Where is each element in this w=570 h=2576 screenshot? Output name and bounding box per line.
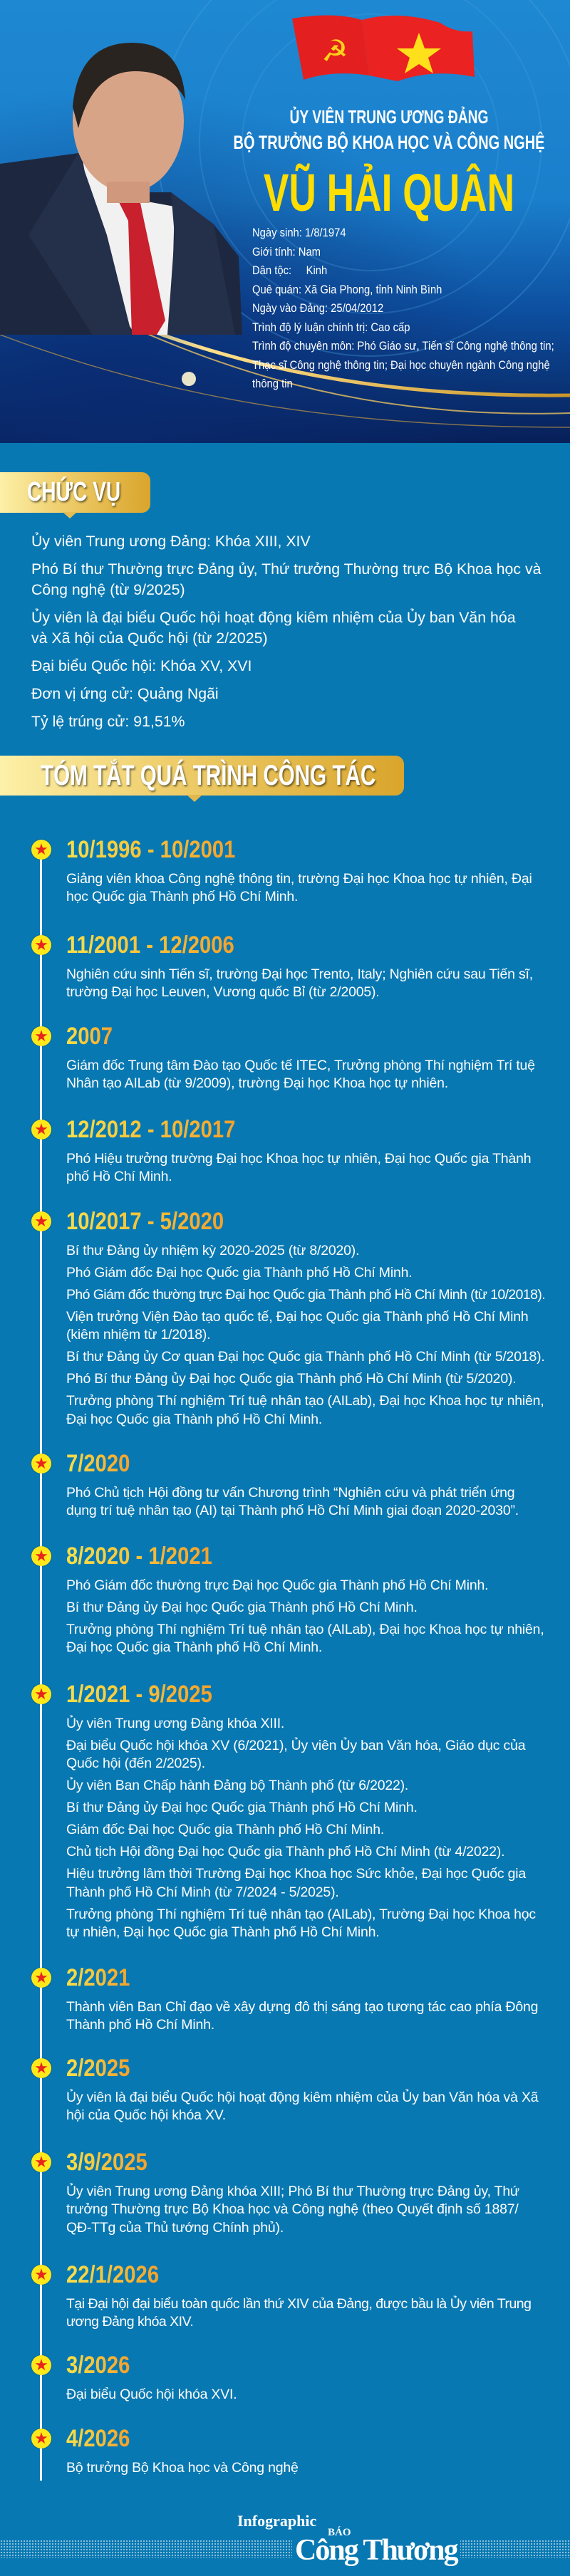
- flag: ☭: [321, 33, 348, 68]
- text block: positions: Tỷ lệ trúng cử: 91,51%: [31, 713, 185, 730]
- timeline item 14: 4/2026: [66, 2425, 130, 2452]
- timeline item 5: [66, 1208, 545, 1427]
- timeline item 13: Đại biểu Quốc hội khóa XVI.: [66, 2387, 237, 2402]
- timeline item 6: Phó Chủ tịch Hội đồng tư vấn Chương trình “Nghiên cứu và phát triển ứng: [66, 1485, 514, 1501]
- timeline item 8: [66, 1681, 536, 1940]
- text block: positions: Đại biểu Quốc hội: Khóa XV, XVI: [31, 657, 252, 674]
- timeline item 4: 12/2012 - 10/2017: [66, 1116, 235, 1143]
- timeline item 6: [66, 1450, 519, 1518]
- footer logo: [237, 2512, 460, 2567]
- personal info: Quê quán: Xã Gia Phong, tỉnh Ninh Bình: [252, 282, 442, 296]
- timeline item 8: Ủy viên Trung ương Đảng khóa XIII.: [66, 1716, 284, 1731]
- personal info: thông tin: [252, 377, 293, 390]
- timeline item 4: Phó Hiệu trưởng trường Đại học Khoa học tự nhiên, Đại học Quốc gia Thành: [66, 1151, 531, 1167]
- timeline item 9: Thành phố Hồ Chí Minh.: [66, 2017, 214, 2033]
- text block: positions: Ủy viên Trung ương Đảng: Khóa XIII, XIV: [31, 533, 311, 550]
- timeline item 3: [66, 1023, 535, 1091]
- timeline item 6: dụng trí tuệ nhân tạo (AI) tại Thành phố Hồ Chí Minh giai đoạn 2020-2030”.: [66, 1503, 519, 1518]
- text block: positions: Công nghệ (từ 9/2025): [31, 581, 185, 598]
- timeline item 14: Bộ trưởng Bộ Khoa học và Công nghệ: [66, 2460, 299, 2476]
- timeline item 9: 2/2021: [66, 1964, 130, 1991]
- photo: portrait: [0, 43, 242, 335]
- text block: positions: [31, 533, 542, 730]
- timeline item 3: Nhân tạo AILab (từ 9/2009), trường Đại học Khoa học tự nhiên.: [66, 1075, 448, 1091]
- timeline item 2: [66, 932, 533, 1000]
- timeline item 8: tự nhiên, Đại học Quốc gia Thành phố Hồ Chí Minh.: [66, 1924, 380, 1940]
- timeline item 12: 22/1/2026: [66, 2261, 159, 2288]
- flag: [292, 16, 475, 81]
- timeline item 5: Phó Bí thư Đảng ủy Đại học Quốc gia Thành phố Hồ Chí Minh (từ 5/2020).: [66, 1371, 516, 1387]
- timeline item 1: Giảng viên khoa Công nghệ thông tin, trường Đại học Khoa học tự nhiên, Đại: [66, 871, 532, 887]
- timeline item 5: Bí thư Đảng ủy Cơ quan Đại học Quốc gia Thành phố Hồ Chí Minh (từ 5/2018).: [66, 1349, 545, 1365]
- heading: timeline: TÓM TẮT QUÁ TRÌNH CÔNG TÁC: [41, 760, 375, 791]
- timeline item 5: Bí thư Đảng ủy nhiệm kỳ 2020-2025 (từ 8/2020).: [66, 1243, 359, 1258]
- timeline item 11: QĐ-TTg của Thủ tướng Chính phủ).: [66, 2220, 284, 2236]
- timeline item 9: Thành viên Ban Chỉ đạo về xây dựng đô thị sáng tạo tương tác cao phía Đông: [66, 1999, 538, 2015]
- timeline item 7: Đại học Quốc gia Thành phố Hồ Chí Minh.: [66, 1639, 322, 1655]
- timeline item 5: Viện trưởng Viện Đào tạo quốc tế, Đại học Quốc gia Thành phố Hồ Chí Minh: [66, 1309, 529, 1325]
- timeline item 10: hội của Quốc hội khóa XV.: [66, 2107, 226, 2123]
- timeline item 7: [66, 1543, 544, 1655]
- heading: timeline: [0, 756, 404, 796]
- title: ỦY VIÊN TRUNG ƯƠNG ĐẢNG: [290, 106, 488, 127]
- timeline item 5: Phó Giám đốc Đại học Quốc gia Thành phố Hồ Chí Minh.: [66, 1265, 412, 1281]
- timeline item 12: ương Đảng khóa XIV.: [66, 2314, 193, 2330]
- footer dotted band: [0, 2540, 570, 2558]
- timeline item 6: 7/2020: [66, 1450, 130, 1477]
- footer logo: BÁO: [328, 2527, 351, 2538]
- text block: positions: Đơn vị ứng cử: Quảng Ngãi: [31, 685, 219, 702]
- personal info: [252, 226, 554, 390]
- personal info: Thạc sĩ Công nghệ thông tin; Đại học chuyên ngành Công nghệ: [252, 358, 550, 372]
- footer logo: Công Thương: [295, 2534, 457, 2567]
- timeline item 8: Đại biểu Quốc hội khóa XV (6/2021), Ủy viên Ủy ban Văn hóa, Giáo dục của: [66, 1738, 525, 1753]
- personal info: Dân tộc: Kinh: [252, 264, 327, 277]
- timeline item 11: [66, 2149, 519, 2236]
- timeline item 8: Ủy viên Ban Chấp hành Đảng bộ Thành phố (từ 6/2022).: [66, 1778, 408, 1793]
- personal info: Ngày vào Đảng: 25/04/2012: [252, 301, 383, 315]
- timeline item 3: 2007: [66, 1023, 113, 1050]
- timeline item 4: [66, 1116, 531, 1184]
- timeline item 14: [66, 2425, 299, 2476]
- timeline item 2: trường Đại học Leuven, Vương quốc Bỉ (từ 2/2005).: [66, 984, 380, 1000]
- timeline item 11: Ủy viên Trung ương Đảng khóa XIII; Phó Bí thư Thường trực Đảng ủy, Thứ: [66, 2184, 519, 2199]
- timeline item 8: Giám đốc Đại học Quốc gia Thành phố Hồ Chí Minh.: [66, 1822, 384, 1837]
- footer logo: Infographic: [237, 2512, 316, 2530]
- timeline item 9: [66, 1964, 538, 2033]
- timeline item 8: Chủ tịch Hội đồng Đại học Quốc gia Thành phố Hồ Chí Minh (từ 4/2022).: [66, 1844, 504, 1860]
- heading: chuc vu: CHỨC VỤ: [27, 477, 120, 507]
- name: VŨ HẢI QUÂN: [264, 163, 514, 222]
- timeline item 5: (kiêm nhiệm từ 1/2018).: [66, 1327, 210, 1342]
- timeline item 8: Quốc hội (đến 2/2025).: [66, 1756, 205, 1771]
- timeline item 8: Bí thư Đảng ủy Đại học Quốc gia Thành phố Hồ Chí Minh.: [66, 1800, 418, 1815]
- timeline item 10: 2/2025: [66, 2055, 130, 2082]
- personal info: Trình độ lý luận chính trị: Cao cấp: [252, 320, 410, 333]
- text block: positions: Phó Bí thư Thường trực Đảng ủy, Thứ trưởng Thường trực Bộ Khoa học và: [31, 560, 541, 578]
- timeline item 8: Trưởng phòng Thí nghiệm Trí tuệ nhân tạo (AILab), Trường Đại học Khoa học: [66, 1907, 536, 1922]
- timeline item 4: phố Hồ Chí Minh.: [66, 1169, 172, 1184]
- header panel: [0, 0, 570, 443]
- timeline item 5: Trưởng phòng Thí nghiệm Trí tuệ nhân tạo (AILab), Đại học Khoa học tự nhiên,: [66, 1393, 544, 1409]
- heading: chuc vu: [0, 472, 150, 513]
- text block: positions: và Xã hội của Quốc hội (từ 2/2025): [31, 630, 268, 647]
- timeline item 13: 3/2026: [66, 2352, 130, 2379]
- text block: positions: Ủy viên là đại biểu Quốc hội hoạt động kiêm nhiệm của Ủy ban Văn hóa: [31, 609, 516, 626]
- timeline item 8: Hiệu trưởng lâm thời Trường Đại học Khoa học Sức khỏe, Đại học Quốc gia: [66, 1866, 526, 1882]
- timeline item 2: 11/2001 - 12/2006: [66, 932, 234, 959]
- timeline item 11: trưởng Thường trực Bộ Khoa học và Công nghệ (theo Quyết định số 1887/: [66, 2201, 519, 2217]
- timeline item 8: 1/2021 - 9/2025: [66, 1681, 212, 1708]
- personal info: Giới tính: Nam: [252, 245, 321, 258]
- timeline item 2: Nghiên cứu sinh Tiến sĩ, trường Đại học Trento, Italy; Nghiên cứu sau Tiến sĩ,: [66, 966, 533, 982]
- title: BỘ TRƯỞNG BỘ KHOA HỌC VÀ CÔNG NGHỆ: [234, 132, 544, 153]
- timeline item 10: [66, 2055, 539, 2123]
- timeline item 7: Phó Giám đốc thường trực Đại học Quốc gia Thành phố Hồ Chí Minh.: [66, 1578, 488, 1593]
- timeline item 3: Giám đốc Trung tâm Đào tạo Quốc tế ITEC, Trưởng phòng Thí nghiệm Trí tuệ: [66, 1058, 535, 1073]
- timeline stars: [31, 839, 52, 2449]
- personal info: Ngày sinh: 1/8/1974: [252, 226, 346, 239]
- timeline item 12: [66, 2261, 532, 2330]
- timeline item 5: Phó Giám đốc thường trực Đại học Quốc gia Thành phố Hồ Chí Minh (từ 10/2018).: [66, 1287, 545, 1303]
- timeline item 1: học Quốc gia Thành phố Hồ Chí Minh.: [66, 889, 298, 904]
- timeline item 7: 8/2020 - 1/2021: [66, 1543, 212, 1570]
- timeline item 11: 3/9/2025: [66, 2149, 147, 2176]
- timeline item 7: Trưởng phòng Thí nghiệm Trí tuệ nhân tạo (AILab), Đại học Khoa học tự nhiên,: [66, 1622, 544, 1637]
- timeline item 5: 10/2017 - 5/2020: [66, 1208, 224, 1235]
- timeline item 12: Tại Đại hội đại biểu toàn quốc lần thứ XIV của Đảng, được bầu là Ủy viên Trung: [66, 2296, 532, 2312]
- personal info: Trình độ chuyên môn: Phó Giáo sư, Tiến sĩ Công nghệ thông tin;: [252, 339, 554, 353]
- timeline item 1: [66, 836, 532, 904]
- timeline item 13: [66, 2352, 237, 2402]
- timeline item 7: Bí thư Đảng ủy Đại học Quốc gia Thành phố Hồ Chí Minh.: [66, 1600, 418, 1615]
- timeline item 1: 10/1996 - 10/2001: [66, 836, 235, 863]
- timeline line: [40, 851, 42, 2481]
- title: [234, 106, 544, 153]
- timeline item 8: Thành phố Hồ Chí Minh (từ 7/2024 - 5/2025).: [66, 1884, 339, 1900]
- timeline item 5: Đại học Quốc gia Thành phố Hồ Chí Minh.: [66, 1412, 322, 1427]
- timeline item 10: Ủy viên là đại biểu Quốc hội hoạt động kiêm nhiệm của Ủy ban Văn hóa và Xã: [66, 2090, 538, 2105]
